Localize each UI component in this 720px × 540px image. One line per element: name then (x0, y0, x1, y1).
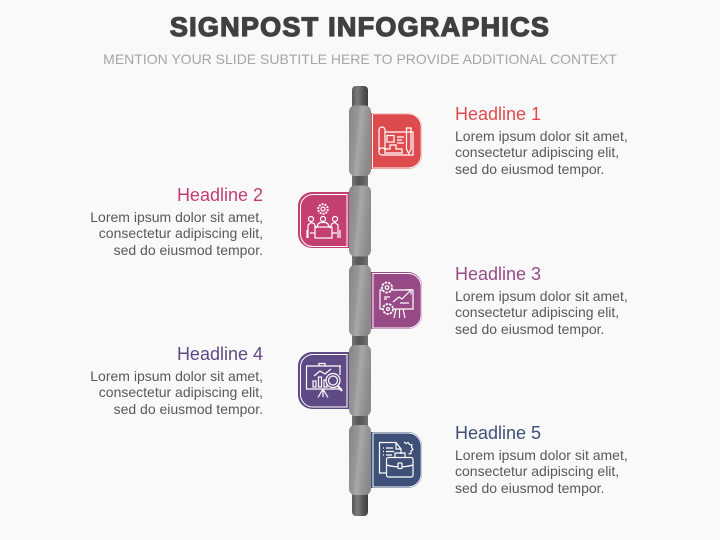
text block 3 (455, 264, 628, 337)
body 5: Lorem ipsum dolor sit amet, (455, 447, 628, 463)
body 4: Lorem ipsum dolor sit amet, (90, 368, 263, 384)
icon: blueprint and pencil (379, 127, 413, 155)
body 2: Lorem ipsum dolor sit amet, (90, 209, 263, 225)
body 4: sed do eiusmod tempor. (114, 401, 263, 417)
body 5 (455, 447, 628, 496)
headline 2: Headline 2 (177, 185, 263, 205)
body 3: Lorem ipsum dolor sit amet, (455, 288, 628, 304)
body 1 (455, 128, 628, 177)
pole (352, 86, 368, 516)
icon: briefcase with document and gear (380, 442, 413, 477)
headline 1: Headline 1 (455, 104, 541, 124)
headline 5: Headline 5 (455, 423, 541, 443)
text block 1 (455, 104, 628, 177)
flag 5 (371, 432, 422, 488)
icon: analytics board with magnifier (306, 364, 342, 398)
flag 1 (371, 113, 422, 169)
body 4 (90, 368, 263, 417)
body 3: consectetur adipiscing elit, (455, 304, 619, 320)
text block 2 (90, 185, 263, 258)
body 1: consectetur adipiscing elit, (455, 144, 619, 160)
body 2: sed do eiusmod tempor. (114, 242, 263, 258)
body 5: sed do eiusmod tempor. (455, 480, 604, 496)
icon: presentation with gears (380, 282, 413, 318)
body 4: consectetur adipiscing elit, (99, 384, 263, 400)
flag 4 (298, 352, 349, 409)
body 2 (90, 209, 263, 258)
body 1: sed do eiusmod tempor. (455, 161, 604, 177)
subtitle: MENTION YOUR SLIDE SUBTITLE HERE TO PROVIDE ADDITIONAL CONTEXT (103, 51, 617, 67)
flag 2 (298, 192, 349, 248)
headline 3: Headline 3 (455, 264, 541, 284)
text block 4 (90, 344, 263, 417)
flag 3 (371, 272, 422, 329)
body 5: consectetur adipiscing elit, (455, 463, 619, 479)
post segments (349, 106, 371, 495)
body 3 (455, 288, 628, 337)
headline 4: Headline 4 (177, 344, 263, 364)
text block 5 (455, 423, 628, 496)
body 2: consectetur adipiscing elit, (99, 225, 263, 241)
icon: meeting table (307, 204, 340, 238)
body 1: Lorem ipsum dolor sit amet, (455, 128, 628, 144)
body 3: sed do eiusmod tempor. (455, 321, 604, 337)
title: SIGNPOST INFOGRAPHICS (170, 12, 550, 42)
